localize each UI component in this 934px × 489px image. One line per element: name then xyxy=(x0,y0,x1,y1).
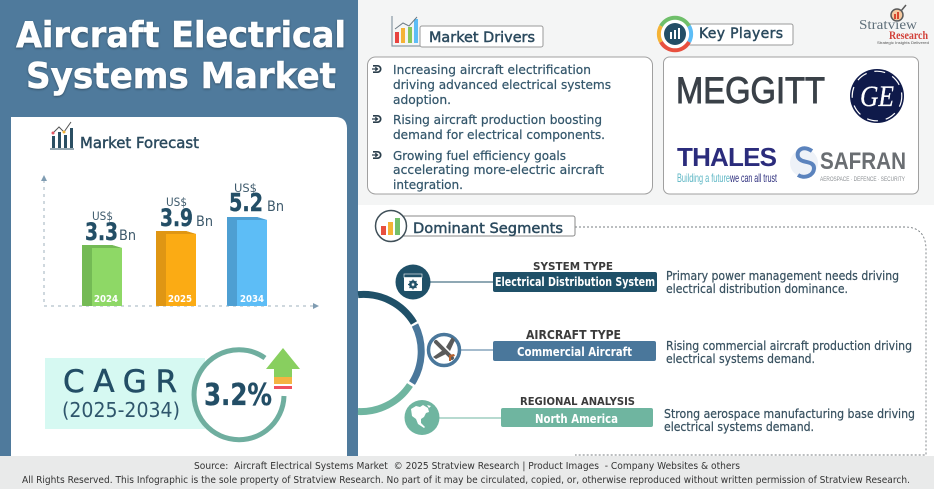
driver 3: accelerating more-electric aircraft xyxy=(393,162,604,177)
icon: system gear xyxy=(396,264,430,300)
driver 3 xyxy=(372,148,604,192)
segment: system type: Electrical Distribution System xyxy=(495,274,655,289)
heading: market forecast: Market Forecast xyxy=(80,134,199,152)
heading: market drivers xyxy=(392,16,543,47)
driver 1: adoption. xyxy=(393,92,451,107)
icon: north america globe xyxy=(404,400,440,435)
logo: Thales xyxy=(677,142,777,185)
bar: 2025: US$ xyxy=(166,195,187,209)
icon: up arrow xyxy=(266,348,300,389)
icon: airplane xyxy=(428,334,460,366)
driver 1: Increasing aircraft electrification xyxy=(393,62,591,77)
logo: Meggitt: MEGGITT xyxy=(676,70,825,111)
footer: source and rights: All Rights Reserved. This Infographic is the sole property of Stratview Research. No part of it may be circulated, copied, or, otherwise reproduced without written permission of Stratview Research. xyxy=(22,475,910,486)
bar: 2025: Bn xyxy=(196,214,213,230)
bar: 2025: 3.9 xyxy=(160,204,193,232)
panel: market drivers xyxy=(368,57,652,194)
segment: system type xyxy=(396,260,899,300)
logo: GE: GE xyxy=(860,80,894,113)
segment: system type: Primary power management needs driving xyxy=(666,269,899,283)
logo: Stratview Research: Research xyxy=(889,30,929,42)
logo: Stratview Research xyxy=(859,5,929,45)
bar: 2025: 2025 xyxy=(168,294,192,305)
bar: 2024: 2024 xyxy=(94,294,118,305)
segment: system type: electrical distribution dominance. xyxy=(666,282,848,296)
segment: aircraft type: electrical systems demand. xyxy=(666,352,815,366)
heading: market drivers: Market Drivers xyxy=(429,30,535,46)
driver 3: integration. xyxy=(393,177,463,192)
heading: market forecast xyxy=(50,122,199,152)
segment: aircraft type: AIRCRAFT TYPE xyxy=(526,327,621,342)
icon: key players ring xyxy=(659,18,691,50)
panel: left market overview xyxy=(0,0,358,456)
callout: CAGR: (2025-2034) xyxy=(62,398,180,422)
bar: 2034: 2034 xyxy=(240,294,264,305)
bar: 2034: 5.2 xyxy=(229,188,263,217)
logo: Safran xyxy=(790,148,906,183)
logo: Safran: AEROSPACE · DEFENCE · SECURITY xyxy=(820,176,905,183)
segment: regional analysis: Strong aerospace manufacturing base driving xyxy=(664,407,915,421)
footer: source and rights xyxy=(0,456,934,489)
logo: Stratview Research: Strategic Insights Delivered xyxy=(877,40,929,45)
segment: regional analysis: North America xyxy=(535,411,618,426)
footer: source and rights: Source: Aircraft Electrical Systems Market © 2025 Stratview Research | Product Images - Company Websites & others xyxy=(194,461,740,472)
bar: 2024: US$ xyxy=(92,209,113,223)
segment: aircraft type: Rising commercial aircraft production driving xyxy=(666,339,912,353)
panel: key players logos xyxy=(664,57,918,194)
chart: market forecast bars xyxy=(41,175,319,309)
logo: Thales: THALES xyxy=(677,142,777,172)
bar: 2025 xyxy=(156,195,213,306)
segment: regional analysis: REGIONAL ANALYSIS xyxy=(520,395,635,408)
segment: system type: SYSTEM TYPE xyxy=(533,260,613,273)
segment: aircraft type xyxy=(428,327,912,366)
heading: dominant segments xyxy=(376,210,926,455)
bar: 2024: Bn xyxy=(119,228,136,244)
logo: Stratview Research: Stratview xyxy=(859,17,917,32)
driver 3: Growing fuel efficiency goals xyxy=(393,148,566,163)
bar: 2034: Bn xyxy=(267,199,284,215)
logo: Safran: SAFRAN xyxy=(820,148,906,175)
heading: key players xyxy=(659,18,793,50)
icon: market drivers chart xyxy=(392,16,420,46)
bar: 2024: 3.3 xyxy=(85,218,118,246)
callout: CAGR xyxy=(45,348,300,440)
bar: 2034: US$ xyxy=(234,181,257,195)
callout: CAGR: 3.2% xyxy=(204,378,272,413)
segment: regional analysis xyxy=(404,395,915,435)
logo: Thales: Building a future xyxy=(677,171,730,185)
logo: Thales: we can all trust xyxy=(729,171,777,185)
bar: 2024 xyxy=(82,209,136,306)
title: Systems Market xyxy=(26,56,336,97)
driver 1 xyxy=(372,62,611,107)
segment: regional analysis: electrical systems demand. xyxy=(664,420,814,434)
icon: bar chart trend xyxy=(50,122,74,149)
driver 2 xyxy=(372,112,605,142)
title xyxy=(16,15,346,97)
title: Aircraft Electrical xyxy=(16,15,346,56)
driver 2: demand for electrical components. xyxy=(393,127,605,142)
heading: dominant segments: Dominant Segments xyxy=(413,221,563,237)
icon: dominant segments xyxy=(376,210,406,242)
driver 1: driving advanced electrical systems xyxy=(393,77,611,92)
driver 2: Rising aircraft production boosting xyxy=(393,112,602,127)
callout: CAGR: CAGR xyxy=(63,364,177,400)
bar: 2034 xyxy=(227,181,284,306)
heading: key players: Key Players xyxy=(699,26,783,42)
diagram: segment arc xyxy=(358,294,421,412)
segment: aircraft type: Commercial Aircraft xyxy=(517,344,632,359)
logo: GE xyxy=(850,69,904,123)
